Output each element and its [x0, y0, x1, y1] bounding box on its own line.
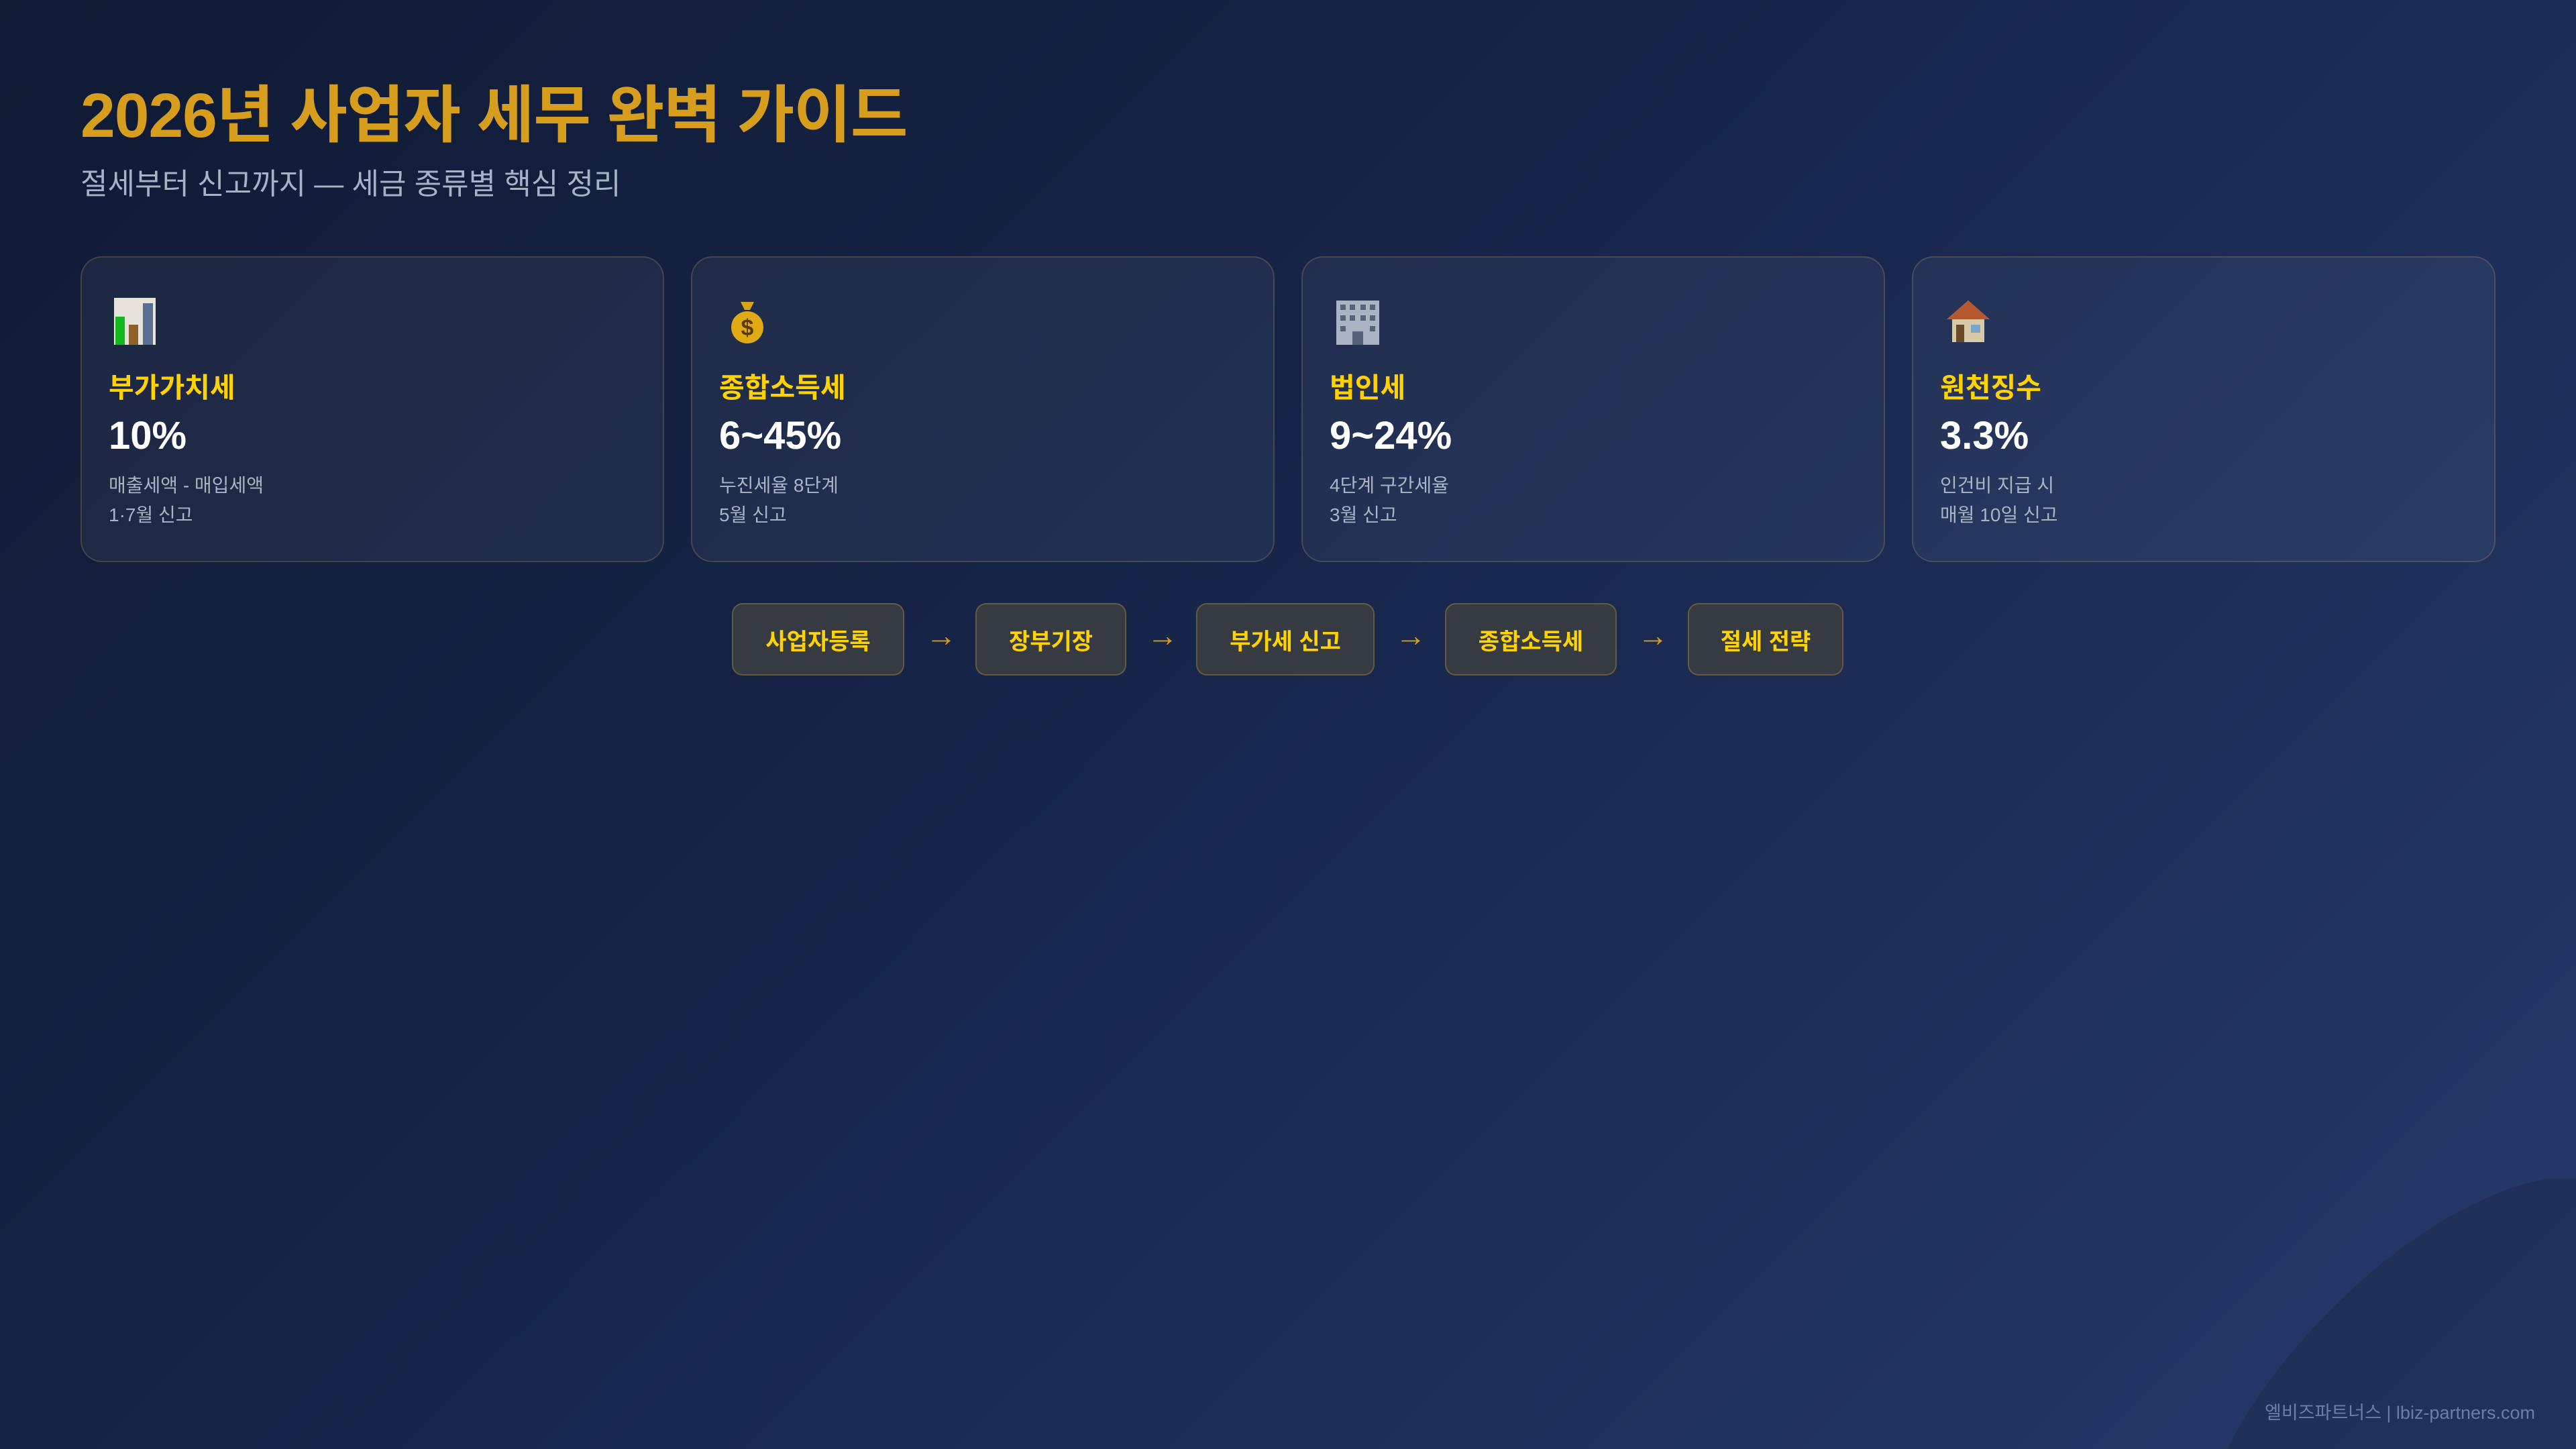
- icon: house: [1947, 301, 1990, 342]
- panel: 원천징수: [1912, 256, 2496, 562]
- description: [1330, 475, 1449, 525]
- arrow: →: [1395, 618, 1426, 653]
- step: 사업자등록: 사업자등록: [765, 629, 871, 655]
- description: 1·7월 신고: [109, 504, 193, 525]
- description: 5월 신고: [719, 504, 787, 525]
- icon: money bag: $: [741, 315, 754, 341]
- label: 종합소득세: [719, 372, 846, 403]
- description: 매출세액 - 매입세액: [109, 475, 264, 496]
- icon: money bag: [731, 302, 763, 343]
- label: 법인세: [1330, 372, 1405, 403]
- description: [719, 475, 839, 525]
- step: 장부기장: [975, 603, 1126, 676]
- footer: 엘비즈파트너스 | lbiz-partners.com: [2265, 1403, 2535, 1423]
- subtitle: 절세부터 신고까지 — 세금 종류별 핵심 정리: [80, 168, 621, 201]
- value: 10%: [109, 414, 186, 458]
- description: 누진세율 8단계: [719, 475, 839, 496]
- step: 사업자등록: [732, 603, 904, 676]
- label: 부가가치세: [109, 372, 235, 403]
- description: 매월 10일 신고: [1940, 504, 2058, 525]
- description: 인건비 지급 시: [1940, 475, 2054, 496]
- description: [1940, 475, 2058, 525]
- step: 장부기장: 장부기장: [1009, 629, 1093, 655]
- step: 부가세 신고: 부가세 신고: [1230, 629, 1341, 655]
- panel: 종합소득세: [691, 256, 1275, 562]
- step: 종합소득세: 종합소득세: [1479, 629, 1583, 655]
- step: 절세 전략: 절세 전략: [1721, 629, 1811, 655]
- title: 2026년 사업자 세무 완벽 가이드: [80, 80, 907, 150]
- value: 3.3%: [1940, 414, 2029, 458]
- panel: 부가가치세: [80, 256, 664, 562]
- value: 6~45%: [719, 414, 841, 458]
- label: 원천징수: [1940, 372, 2041, 403]
- arrow: →: [1147, 618, 1178, 653]
- icon: office building: [1336, 301, 1379, 345]
- panel: 법인세: [1301, 256, 1885, 562]
- value: 9~24%: [1330, 414, 1452, 458]
- description: [109, 475, 264, 525]
- description: 3월 신고: [1330, 504, 1397, 525]
- step: 종합소득세: [1445, 603, 1617, 676]
- arrow: →: [926, 618, 957, 653]
- arrow: →: [1638, 618, 1668, 653]
- step: 부가세 신고: [1196, 603, 1375, 676]
- description: 4단계 구간세율: [1330, 475, 1449, 496]
- icon: bar chart: [114, 298, 156, 345]
- step: 절세 전략: [1688, 603, 1843, 676]
